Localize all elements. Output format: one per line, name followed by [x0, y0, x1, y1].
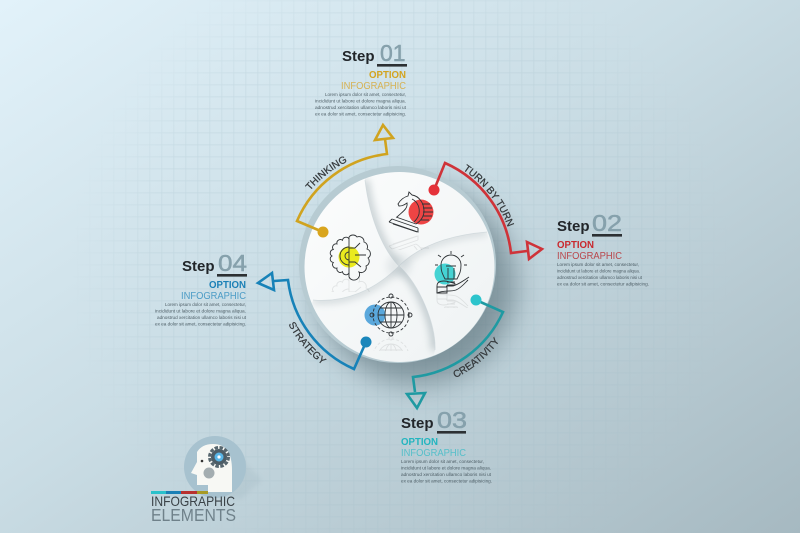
icon: knight with red circle [388, 191, 434, 250]
petal seams [313, 180, 487, 350]
text block: step 02 [557, 210, 649, 286]
text block: step 03: OPTION [401, 437, 438, 448]
text block: step 04: ex ea dolor sit amet, consectetur adipisicing. [155, 322, 246, 326]
text block: step 03: ex ea dolor sit amet, consectetur adipisicing. [401, 478, 492, 484]
label: creativity: CREATIVITY [454, 336, 498, 377]
disc outer ring [299, 166, 496, 363]
disc shadow [316, 184, 516, 384]
icon: globe with blue circle [364, 294, 412, 351]
label: strategy: STRATEGY [289, 322, 327, 364]
disc face [304, 172, 494, 362]
text block: step 01: OPTION [369, 70, 406, 81]
logo circle [184, 436, 246, 498]
logo gear [210, 448, 228, 466]
text block: step 03: INFOGRAPHIC [401, 447, 466, 459]
text block: step 04: Lorem ipsum dolor sit amet, consectetur, [165, 302, 246, 307]
text block: step 02: OPTION [557, 240, 594, 251]
arrow: turn by turn [428, 163, 542, 259]
logo head [191, 444, 232, 492]
text block: step 01: INFOGRAPHIC [341, 80, 406, 92]
text block: step 01: adnostrud xercitation ullamco laboris nisi ut [315, 105, 407, 110]
text block: step 02: 02 [592, 210, 622, 236]
text block: step 04: INFOGRAPHIC [181, 290, 246, 302]
text block: step 01: Step [342, 48, 375, 65]
text block: step 04: Step [182, 258, 215, 275]
text block: step 02: INFOGRAPHIC [557, 250, 622, 262]
text block: step 04: 04 [218, 250, 247, 276]
logo: head icon and wordmark: INFOGRAPHIC [151, 493, 235, 509]
text block: step 04 [155, 250, 247, 326]
text block: step 03: 03 [437, 407, 467, 433]
label: thinking: THINKING [304, 156, 346, 189]
text block: step 03: Lorem ipsum dolor sit amet, consectetur, [401, 459, 484, 464]
arrow: creativity [407, 294, 503, 408]
text block: step 03: Step [401, 415, 434, 432]
text block: step 03: incididunt ut labore et dolore magna aliqua. [401, 466, 491, 470]
text block: step 03 [401, 407, 492, 484]
text block: step 02: Step [557, 218, 590, 235]
central pinwheel disc [299, 166, 496, 363]
arrow: thinking [297, 125, 393, 238]
label: turn by turn: TURN BY TURN [464, 164, 514, 227]
text block: step 04: incididunt ut labore et dolore magna aliqua. [155, 308, 246, 314]
text block: step 01 [315, 40, 407, 116]
text block: step 04: adnostrud xercitation ullamco laboris nisi ut [157, 315, 247, 320]
text block: step 03: adnostrud xercitation ullamco laboris nisi ut [401, 472, 492, 477]
text block: step 02: ex ea dolor sit amet, consectetur adipisicing. [557, 282, 649, 286]
text block: step 02: adnostrud xercitation ullamco laboris nisi ut [557, 275, 643, 280]
logo: head icon and wordmark: ELEMENTS [151, 505, 236, 525]
text block: step 01: ex ea dolor sit amet, consectetur adipisicing. [315, 112, 406, 116]
icon: gear and brain with yellow circle [330, 234, 371, 292]
text block: step 01: 01 [380, 40, 406, 66]
logo colour bar [151, 491, 208, 494]
logo long shadow [212, 450, 262, 500]
text block: step 04: OPTION [209, 280, 246, 291]
text block: step 01: incididunt ut labore et dolore magna aliqua. [315, 98, 406, 104]
text block: step 02: incididunt ut labore et dolore magna aliqua. [557, 268, 640, 274]
text block: step 01: Lorem ipsum dolor sit amet, consectetur, [325, 92, 406, 97]
logo: head icon and wordmark [151, 436, 262, 525]
icon: light bulb in hand with teal circle [434, 251, 470, 308]
text block: step 02: Lorem ipsum dolor sit amet, consectetur, [557, 262, 639, 267]
arrow: strategy [258, 273, 372, 369]
